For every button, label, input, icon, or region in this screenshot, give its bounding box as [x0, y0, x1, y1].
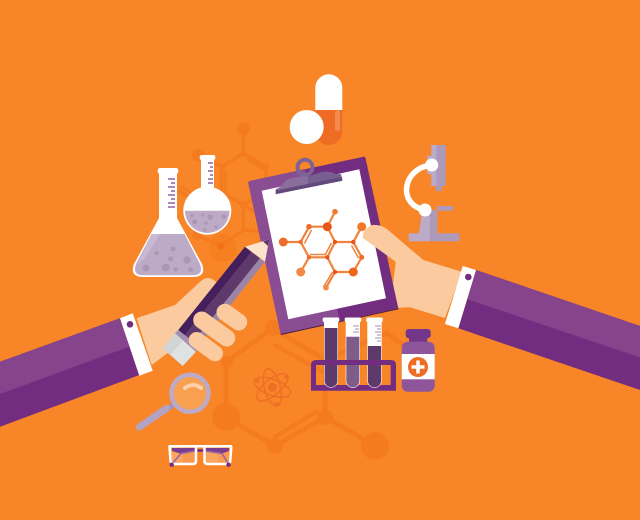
left palm and thumb [137, 278, 218, 365]
right cuff [445, 266, 476, 328]
icon: atom [252, 367, 293, 408]
right sleeve [458, 270, 640, 390]
left cuff [120, 313, 153, 376]
icon: test tube rack [311, 318, 396, 391]
icon: glasses [168, 446, 232, 467]
test tube 3 [366, 318, 383, 388]
left cuff button [127, 321, 133, 328]
icon: pill capsule [290, 74, 342, 145]
molecule diagram on paper [279, 209, 366, 291]
left sleeve [0, 318, 139, 427]
left hand fingers [197, 312, 239, 353]
clipboard paper [262, 169, 386, 319]
right cuff button [465, 274, 472, 280]
icon: microscope [406, 145, 459, 241]
rack top bar [311, 360, 396, 365]
clipboard clip [276, 160, 342, 194]
icon: magnifying glass [139, 375, 208, 427]
right arm [363, 225, 640, 390]
clipboard board [248, 157, 398, 334]
rack lower part [311, 365, 396, 391]
pencil [163, 239, 269, 366]
right hand behind clipboard [390, 260, 462, 318]
icon: round flask [183, 155, 231, 235]
icon: medicine bottle [402, 329, 435, 392]
test tube 1 [323, 318, 339, 388]
test tube 2 [345, 318, 361, 388]
background molecule: top [178, 122, 269, 262]
icon: conical flask [133, 168, 203, 277]
right hand thumb over clipboard [363, 225, 440, 300]
background molecule: bottom [212, 320, 403, 460]
clipboard [248, 157, 399, 335]
left arm and hand [0, 278, 218, 427]
